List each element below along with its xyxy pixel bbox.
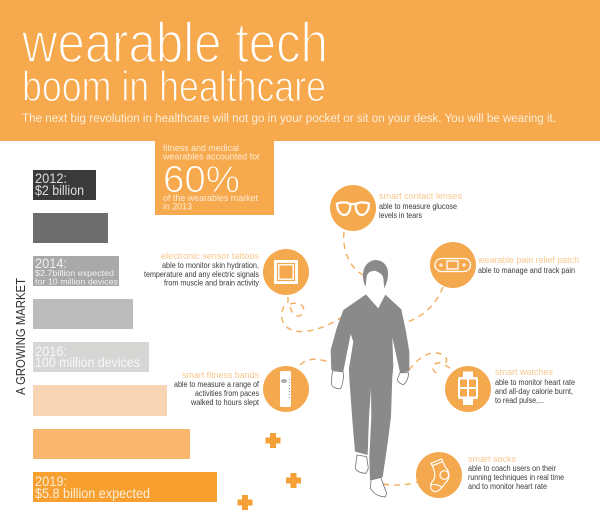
icon: fitness band <box>263 366 309 412</box>
title <box>21 11 328 111</box>
bar: 2012 <box>33 170 96 200</box>
callout: 60% of market: in 2013 <box>163 202 192 212</box>
title: wearable tech <box>21 11 328 75</box>
item: electronic sensor tattoos: temperature and any electric signals <box>144 270 259 279</box>
item: smart watches: to read pulse,... <box>495 396 544 405</box>
bar: 2014: for 10 million devices <box>35 276 118 286</box>
item: smart fitness bands: able to measure a range of <box>174 380 260 389</box>
bar: 2012: $2 billion <box>35 182 84 198</box>
hair <box>363 260 388 288</box>
item: electronic sensor tattoos: from muscle and brain activity <box>164 278 259 288</box>
item: wearable pain relief patch: wearable pain relief patch <box>477 255 579 266</box>
item: electronic sensor tattoos: electronic sensor tattoos <box>161 251 259 262</box>
right shoe <box>370 477 387 497</box>
item: electronic sensor tattoos: able to monitor skin hydration, <box>162 261 259 270</box>
icon: stamp tattoo <box>263 249 309 295</box>
subtitle: The next big revolution in healthcare will not go in your pocket or sit on your desk. You will be wearing it. <box>22 113 556 125</box>
item: smart watches <box>445 366 575 412</box>
item: electronic sensor tattoos <box>144 249 309 295</box>
body <box>331 294 409 480</box>
icon: sock <box>416 452 462 498</box>
axis label: a growing market: A GROWING MARKET <box>14 278 28 395</box>
bar: 2015 <box>33 299 133 329</box>
left shoe <box>355 455 368 473</box>
item: smart contact lenses <box>330 185 462 231</box>
item: wearable pain relief patch: able to manage and track pain <box>478 266 575 275</box>
dashed connectors <box>282 232 453 485</box>
item: smart socks: running techniques in real time <box>468 473 564 482</box>
bar: 2016: 2016: <box>35 343 67 359</box>
bar: 2016: 100 million devices <box>35 354 140 370</box>
bar: 2019 <box>33 472 217 502</box>
item: smart contact lenses: smart contact lenses <box>379 191 462 202</box>
bar: 2014: 2014: <box>35 255 67 271</box>
item: smart fitness bands: activities from paces <box>195 389 259 398</box>
bar: 2013 <box>33 213 108 243</box>
title: boom in healthcare <box>22 63 326 111</box>
bar: 2018 <box>33 429 190 459</box>
item: wearable pain relief patch <box>430 242 579 288</box>
item: smart contact lenses: levels in tears <box>379 211 422 220</box>
item: smart watches: able to monitor heart rate <box>495 378 575 387</box>
callout: 60% of market: fitness and medical <box>163 143 239 153</box>
right hand <box>397 373 408 385</box>
callout: 60% of market: 60% <box>163 159 240 201</box>
item: smart fitness bands: smart fitness bands <box>182 370 259 381</box>
icon: plus signs <box>238 433 301 510</box>
icon: bandage patch <box>430 242 476 288</box>
header banner <box>0 0 600 141</box>
icon: smart watch <box>445 366 491 412</box>
neck and face <box>367 270 385 310</box>
bar: 2014: $2.7billion expected <box>35 268 114 278</box>
bar: 2014 <box>33 255 119 286</box>
bar chart: growing market <box>33 170 217 502</box>
item: smart contact lenses: able to measure glucose <box>379 202 457 211</box>
bar: 2019: $5.8 billion expected <box>35 485 150 501</box>
left hand <box>331 371 343 389</box>
item: smart socks: able to coach users on their <box>468 464 556 473</box>
item: smart socks: smart socks <box>468 454 516 465</box>
man figure <box>331 260 409 497</box>
callout: 60% of market <box>155 140 274 215</box>
icon: glasses <box>330 185 376 231</box>
item: smart watches: and all-day calorie burnt, <box>495 387 573 396</box>
callout: 60% of market: wearables accounted for <box>162 152 260 162</box>
bar: 2016 <box>33 342 149 372</box>
item: smart fitness bands: walked to hours slept <box>190 398 260 407</box>
item: smart socks: and to monitor heart rate <box>468 482 547 491</box>
bar: 2017 <box>33 385 167 416</box>
bar: 2019: 2019: <box>35 473 67 489</box>
item: smart socks <box>416 452 564 498</box>
item: smart fitness bands <box>174 366 309 412</box>
item: smart watches: smart watches <box>495 367 553 378</box>
callout: 60% of market: of the wearables market <box>163 193 258 203</box>
bar: 2012: 2012: <box>35 170 67 186</box>
